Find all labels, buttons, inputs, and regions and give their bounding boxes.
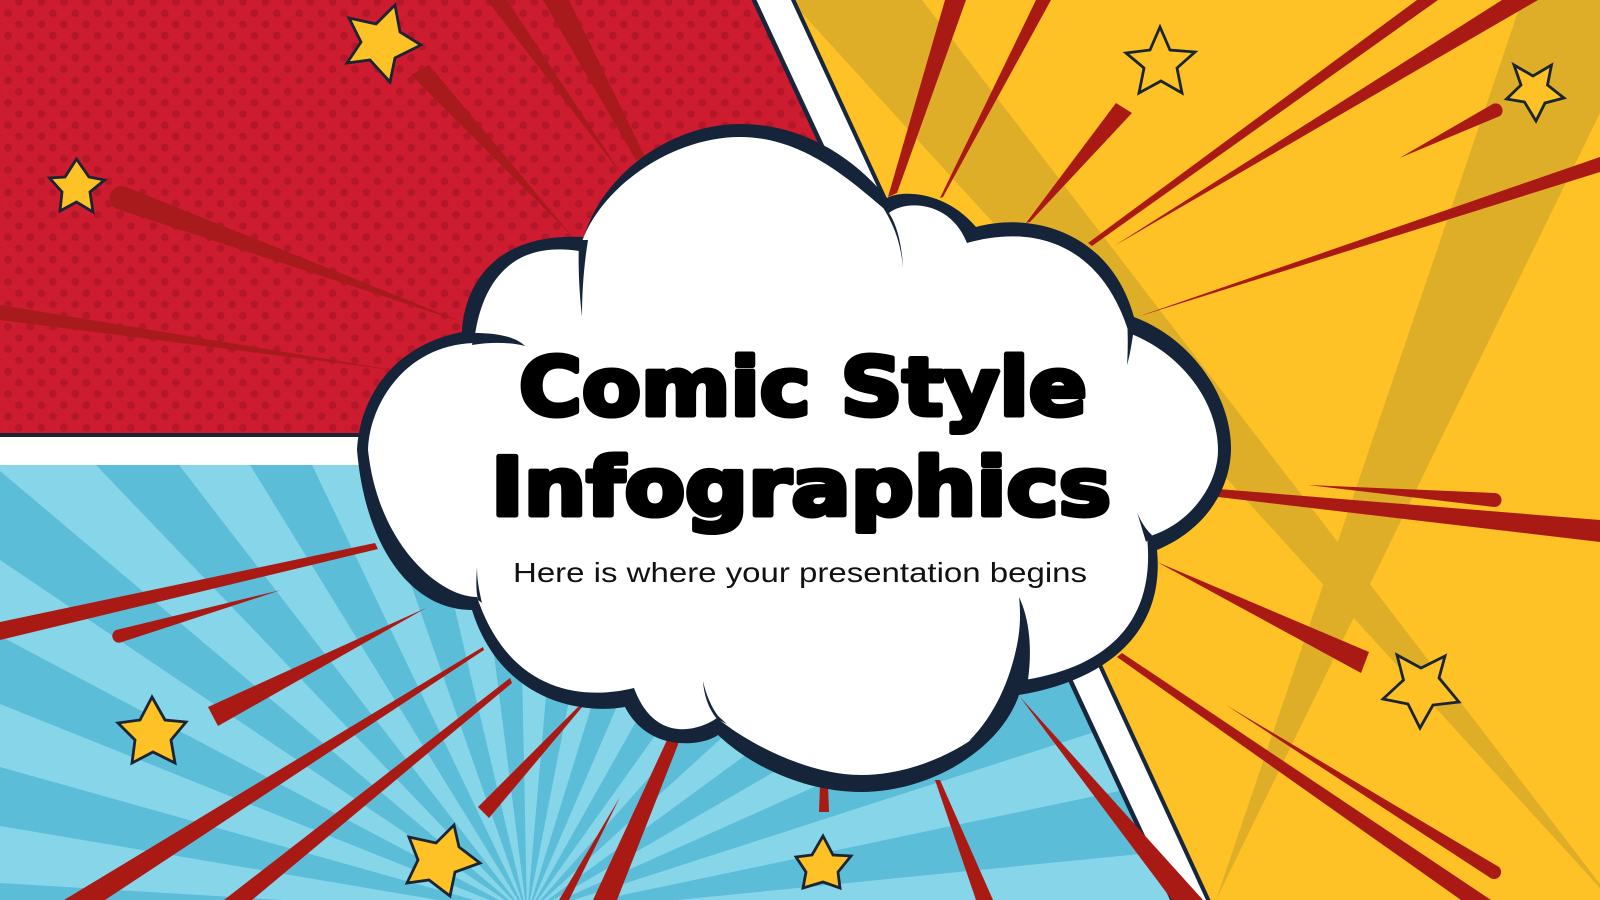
star: red panel top xyxy=(347,5,421,82)
red panel rays xyxy=(0,0,645,370)
star: blue panel left xyxy=(118,697,186,763)
panel: red halftone xyxy=(0,0,960,437)
star: blue panel middle xyxy=(796,836,851,888)
yellow panel rays xyxy=(888,0,1600,900)
title line 1: Comic Style xyxy=(519,341,1087,434)
panel: yellow burst xyxy=(780,0,1600,900)
star: red panel left xyxy=(50,159,105,212)
panel: blue sunburst xyxy=(0,460,1200,900)
speech cloud xyxy=(357,124,1231,792)
star: yellow panel right xyxy=(1507,65,1564,121)
title line 2: Infographics xyxy=(491,441,1111,534)
cloud fill xyxy=(368,137,1218,775)
star: blue panel bottom xyxy=(407,825,480,896)
star: yellow panel top xyxy=(1126,27,1195,93)
title xyxy=(491,341,1111,534)
diagonal white band edges xyxy=(752,0,1210,900)
star: yellow panel lower xyxy=(1383,655,1459,728)
cloud outline xyxy=(357,124,1231,792)
blue panel rays xyxy=(0,543,1203,900)
cloud inner creases xyxy=(472,203,1152,741)
subtitle: Here is where your presentation begins xyxy=(513,557,1087,588)
